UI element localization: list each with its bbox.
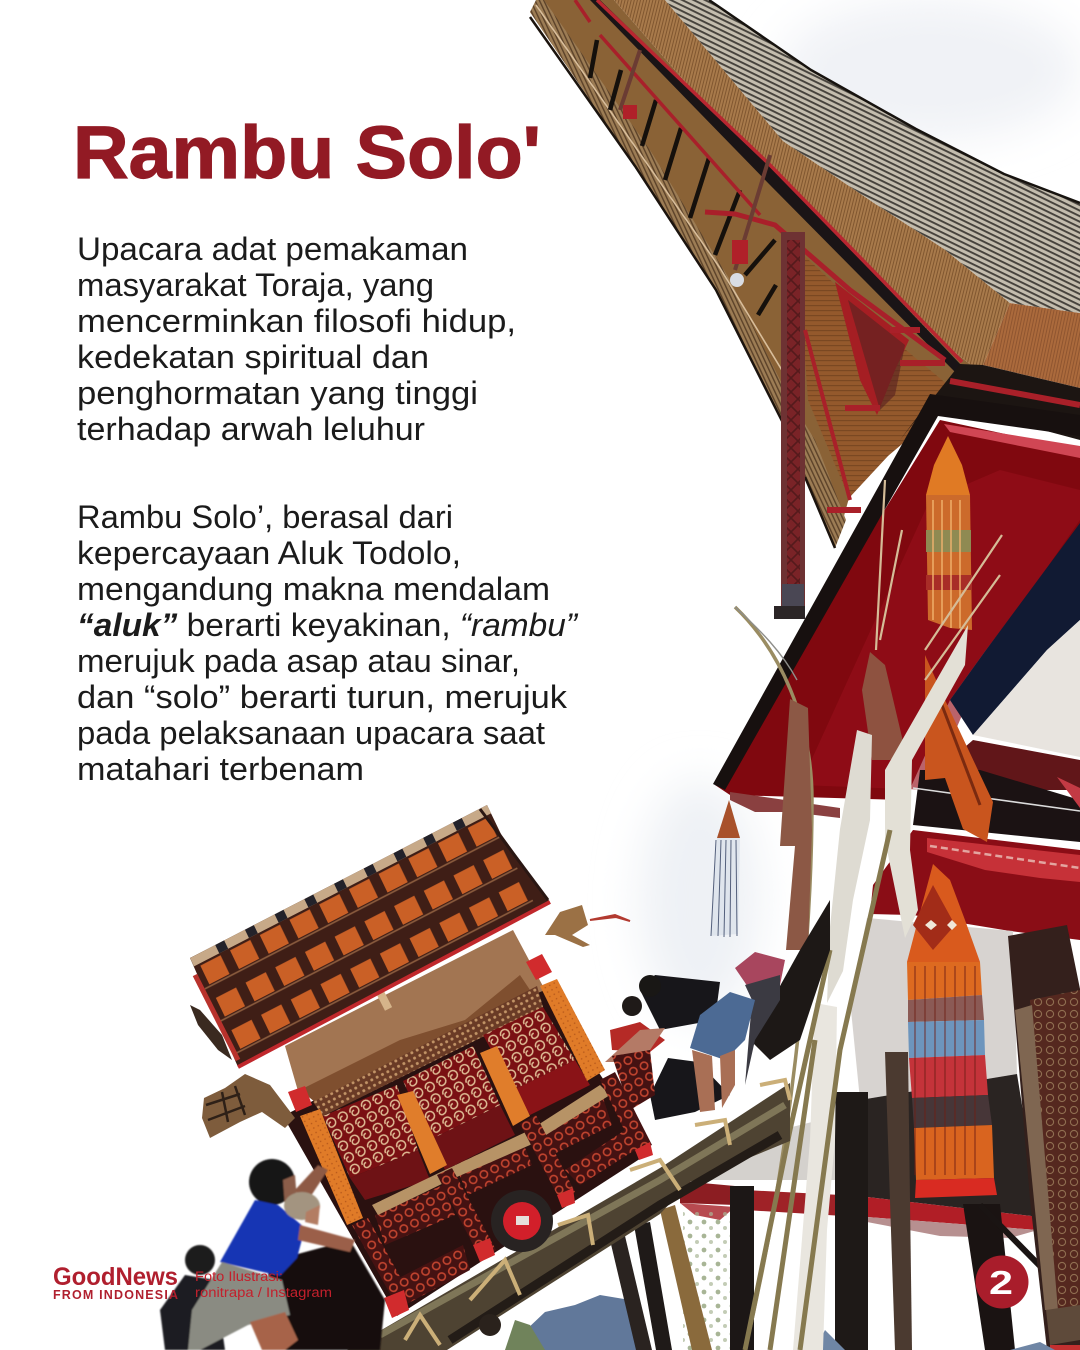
wheel: [491, 1190, 553, 1252]
white cloth one: [827, 730, 872, 1003]
background man: [160, 1245, 225, 1350]
paragraph one: Upacara adat pemakaman: [77, 231, 468, 267]
roof: [190, 805, 550, 1067]
paragraph two: “aluk” berarti keyakinan, “rambu”: [77, 607, 578, 643]
white cloth three: [793, 1003, 837, 1350]
red cross beams: [827, 330, 1080, 510]
logo: GoodNews from Indonesia: [53, 1263, 178, 1302]
lower carved posts: [352, 1072, 652, 1303]
upper carved band: [313, 986, 543, 1116]
paragraph two: mengandung makna mendalam: [77, 571, 550, 607]
carved pillar: [1008, 925, 1080, 1350]
roof fascia thatch: [614, 0, 1010, 369]
patterned cloth: [780, 699, 812, 950]
orange posts: [300, 979, 605, 1225]
blue shirt man: [188, 1159, 355, 1350]
page number badge: [976, 1256, 1028, 1308]
page number badge: 2: [989, 1264, 1013, 1301]
bamboo struts: [745, 830, 890, 1350]
red blocks: [288, 954, 653, 1318]
roof finial left: [190, 1005, 232, 1060]
paragraph two: dan “solo” berarti turun, merujuk: [77, 679, 568, 715]
ceiling: [850, 918, 1017, 1100]
photo: people on the right: [605, 900, 830, 1120]
roof underside panels: [530, 0, 976, 548]
photo: people on the left: [160, 1159, 385, 1350]
red patterned cloth: [862, 652, 905, 760]
carved drum panels: [323, 1007, 590, 1200]
paragraph two: matahari terbenam: [77, 751, 364, 787]
roof shingles: [665, 0, 1080, 313]
beams under canopy: [913, 740, 1080, 842]
title: Rambu Solo': [73, 111, 541, 194]
paragraph one: mencerminkan filosofi hidup,: [77, 303, 516, 339]
photo: tongkonan house: [505, 0, 1080, 1350]
wood under gable: [797, 249, 960, 498]
white cloth two: [885, 625, 968, 938]
man in hat: [284, 1192, 320, 1225]
red lower band: [680, 1181, 1040, 1238]
dragon head left: [202, 1074, 295, 1138]
thin sticks: [876, 480, 1002, 680]
red lower canopy: [870, 830, 1080, 940]
paragraph two: kepercayaan Aluk Todolo,: [77, 535, 461, 571]
roof strut: [805, 330, 850, 500]
cream ceiling: [973, 620, 1080, 757]
dragon head right: [545, 905, 630, 947]
paragraph two: merujuk pada asap atau sinar,: [77, 643, 520, 679]
logo: GoodNews from Indonesia: FROM INDONESIA: [53, 1288, 178, 1302]
rope bindings: [405, 1080, 790, 1345]
red canopy: [713, 394, 1080, 818]
lower carved panels: [372, 1085, 635, 1305]
paragraph two: pada pelaksanaan upacara saat: [77, 715, 545, 751]
photo credit: [195, 1269, 332, 1300]
navy underside: [950, 523, 1080, 735]
small lantern: [710, 800, 740, 937]
dark frame behind canopy: [900, 364, 1080, 440]
paragraph one: terhadap arwah leluhur: [77, 411, 425, 447]
lower frame and body: [283, 986, 652, 1316]
cloths and bamboo poles: [735, 480, 1002, 1350]
paragraph two: Rambu Solo’, berasal dari: [77, 499, 453, 535]
tan cloth panel: [285, 930, 545, 1098]
paragraph one: [77, 231, 516, 447]
photo: palanquin (lakkean): [190, 805, 653, 1318]
dark posts: [730, 1052, 1042, 1350]
paragraph one: kedekatan spiritual dan: [77, 339, 429, 375]
roof end: [983, 303, 1080, 388]
photo: bamboo ramp log: [347, 1080, 790, 1350]
paragraph two: [77, 499, 578, 787]
red carved gable ornament: [835, 282, 909, 415]
paragraph one: masyarakat Toraja, yang: [77, 267, 434, 303]
dark mass of people: [268, 1240, 385, 1350]
orange cloth: [925, 655, 993, 842]
upper lantern: [926, 436, 972, 630]
red beam along roof: [590, 0, 962, 372]
background hills and foliage: [505, 1212, 1055, 1350]
photo credit: ronitrapa / Instagram: [195, 1285, 332, 1300]
carved post: [774, 232, 805, 619]
poles under ramp: [610, 1205, 712, 1350]
large beaded lantern: [907, 864, 997, 1198]
paragraph one: penghormatan yang tinggi: [77, 375, 478, 411]
photo credit: Foto Ilustrasi:: [195, 1269, 283, 1284]
logo: GoodNews from Indonesia: GoodNews: [53, 1263, 178, 1291]
